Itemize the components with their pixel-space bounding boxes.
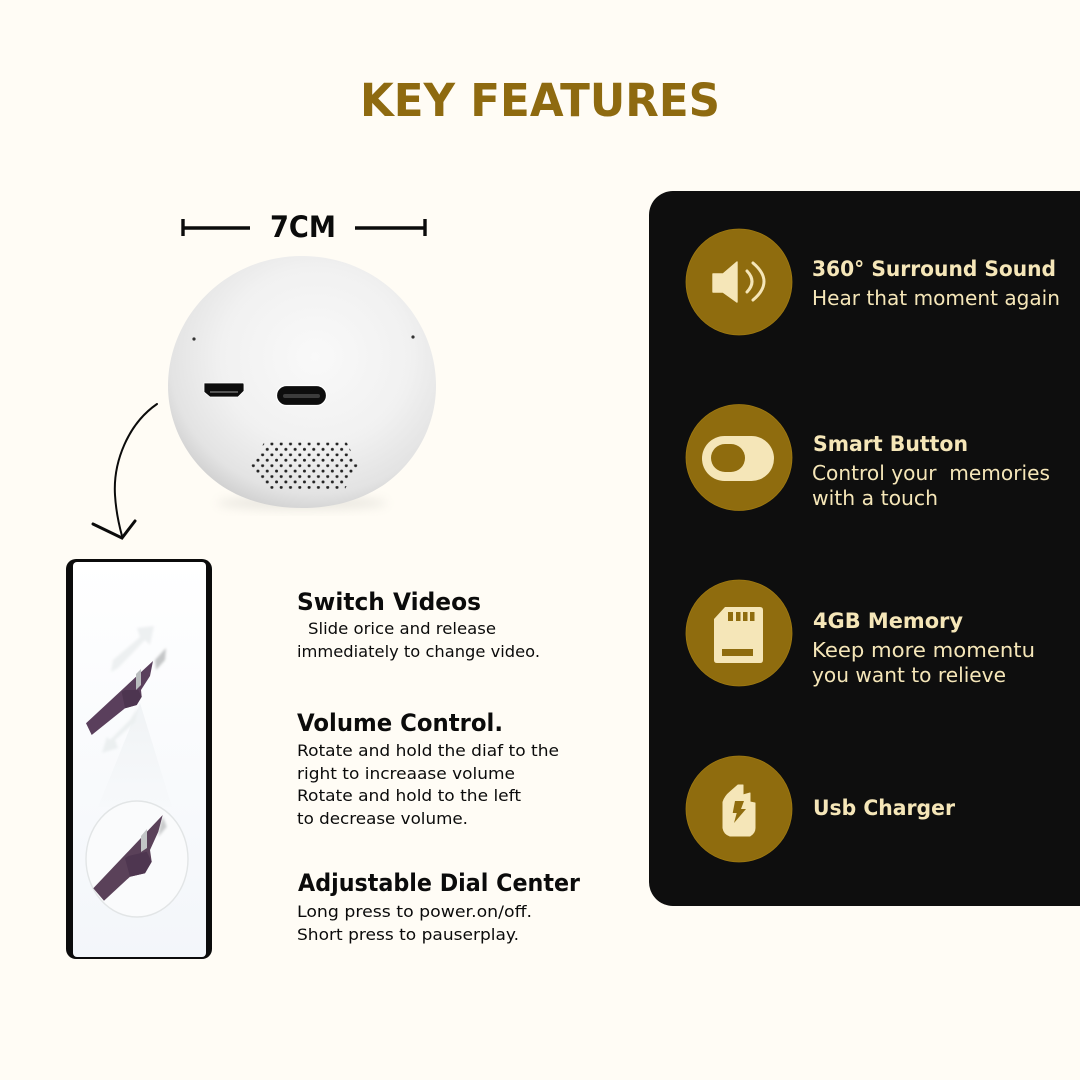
title: KEY FEATURES xyxy=(360,74,720,127)
text: smart button: Control your memories xyxy=(812,461,1050,485)
feature: adjustable dial center xyxy=(297,869,580,944)
dial knob xyxy=(86,648,166,735)
rotation arrow down xyxy=(102,707,138,753)
feature: volume control: Rotate and hold to the left xyxy=(297,786,521,805)
text: smart button xyxy=(812,432,1050,510)
feature: switch videos xyxy=(297,588,540,661)
dial detail panel xyxy=(66,559,212,959)
dimension marker: 7CM xyxy=(183,210,425,244)
feature: adjustable dial center: Adjustable Dial Center xyxy=(298,869,580,897)
port: USB-C xyxy=(276,386,326,406)
text: memory: you want to relieve xyxy=(812,663,1006,687)
text: smart button: with a touch xyxy=(812,486,938,510)
feature list: dial controls xyxy=(297,588,580,944)
port: HDMI xyxy=(204,383,244,397)
text: surround sound: Hear that moment again xyxy=(812,286,1060,310)
dimension marker: 7CM: 7CM xyxy=(270,210,336,244)
icon: speaker xyxy=(686,229,792,335)
panel: black feature card xyxy=(649,191,1080,906)
product: white speaker ball xyxy=(168,256,436,510)
text: surround sound xyxy=(812,257,1060,310)
speaker grille xyxy=(251,441,358,489)
feature: volume control: right to increaase volume xyxy=(297,764,515,783)
feature: volume control: Volume Control. xyxy=(297,709,503,737)
arrow: from ball to dial detail xyxy=(93,404,157,538)
text: usb charger: Usb Charger xyxy=(813,796,956,820)
text: smart button: Smart Button xyxy=(813,432,968,456)
zoom cone xyxy=(98,703,172,807)
text: surround sound: 360° Surround Sound xyxy=(812,257,1056,281)
feature: volume control: to decrease volume. xyxy=(297,809,468,828)
feature: switch videos: Switch Videos xyxy=(297,588,481,616)
feature: volume control xyxy=(297,709,559,828)
feature: adjustable dial center: Long press to power.on/off. xyxy=(297,902,532,921)
feature: switch videos: immediately to change video. xyxy=(297,642,540,661)
feature: volume control: Rotate and hold the diaf to the xyxy=(297,741,559,760)
icon: memory card xyxy=(686,580,792,686)
icon: toggle button xyxy=(686,404,792,510)
magnifier circle xyxy=(86,801,188,917)
icon: usb charger xyxy=(686,756,792,862)
feature: switch videos: Slide orice and release xyxy=(308,619,496,638)
text: memory: 4GB Memory xyxy=(813,609,963,633)
text: memory xyxy=(812,609,1035,687)
rotation arrow up xyxy=(111,626,154,672)
text: memory: Keep more momentu xyxy=(812,638,1035,662)
feature: adjustable dial center: Short press to pauserplay. xyxy=(297,925,519,944)
